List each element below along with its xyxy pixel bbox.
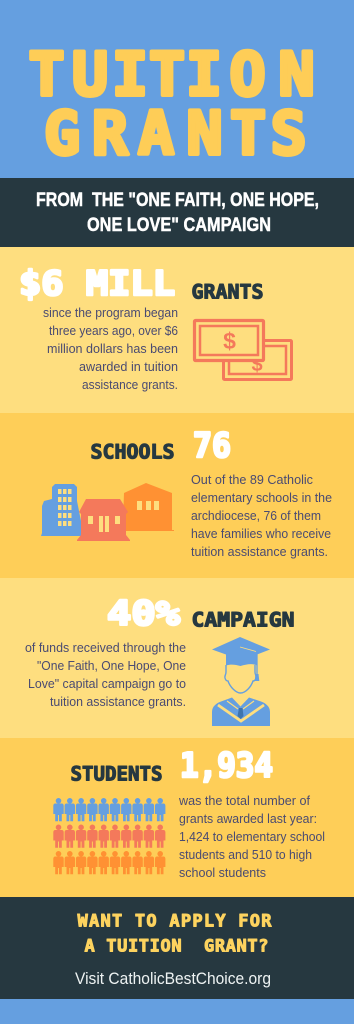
stat: 40%: 40% (107, 594, 181, 634)
stat: 1,934: 1,934 (180, 746, 273, 786)
icon: blue row of students (53, 798, 165, 821)
icon: graduate (212, 637, 270, 726)
heading: campaign: CAMPAIGN (192, 608, 294, 632)
text: grants description (43, 305, 178, 392)
text: campaign description: Love" capital campaign go to (28, 676, 186, 691)
header band (0, 0, 354, 178)
panel: students (0, 738, 354, 897)
text: schools description (191, 472, 332, 559)
icon: red row of students (53, 824, 165, 848)
text: campaign description: tuition assistance grants. (50, 694, 186, 709)
text: campaign description: "One Faith, One Hope, One (37, 658, 186, 673)
icon: dollar bills: $ (223, 328, 236, 354)
text: students description: students and 510 to high (179, 847, 312, 862)
text: schools description: archdiocese, 76 of them (191, 508, 321, 523)
subtitle band: ONE LOVE" CAMPAIGN (87, 214, 271, 236)
bottom band (0, 999, 354, 1024)
text: schools description: have families who receive (191, 526, 331, 541)
call to action heading: A TUITION GRANT? (84, 936, 268, 956)
stat: 76: 76 (193, 426, 231, 466)
subtitle band (0, 178, 354, 247)
call to action heading (78, 912, 272, 956)
heading: schools: SCHOOLS (90, 440, 174, 464)
text: grants description: since the program began (43, 305, 178, 320)
text: students description: was the total number of (178, 793, 310, 808)
icon: orange row of students (53, 851, 165, 874)
text: students description: school students (179, 865, 266, 880)
text: grants description: assistance grants. (82, 377, 178, 392)
panel: grants (0, 247, 354, 413)
panel: schools (0, 413, 354, 578)
title: TUITION (28, 40, 315, 110)
icon: dollar bills (194, 320, 292, 380)
footer band (0, 897, 354, 999)
text: schools description: elementary schools in the (191, 490, 332, 505)
stat: $6 mill: $6 MILL (19, 264, 175, 304)
text: grants description: million dollars has been (47, 341, 178, 356)
text: schools description: Out of the 89 Catholic (191, 472, 313, 487)
heading: grants: GRANTS (192, 280, 264, 304)
text: grants description: three years ago, over $6 (49, 323, 178, 338)
text: schools description: tuition assistance grants. (191, 544, 328, 559)
text: students description: grants awarded last year: (179, 811, 317, 826)
title: GRANTS (44, 99, 307, 169)
text: campaign description: of funds received through the (25, 640, 186, 655)
panel: campaign (0, 578, 354, 738)
footer link text: Visit CatholicBestChoice.org (75, 969, 271, 988)
text: students description (178, 793, 325, 880)
call to action heading: WANT TO APPLY FOR (78, 912, 272, 932)
icon: dollar bills: $ (251, 354, 263, 376)
title (28, 40, 315, 169)
text: students description: 1,424 to elementary school (179, 829, 325, 844)
text: campaign description (25, 640, 186, 709)
icon: school buildings (41, 483, 174, 541)
text: grants description: awarded in tuition (79, 359, 178, 374)
heading: students: STUDENTS (70, 762, 162, 786)
